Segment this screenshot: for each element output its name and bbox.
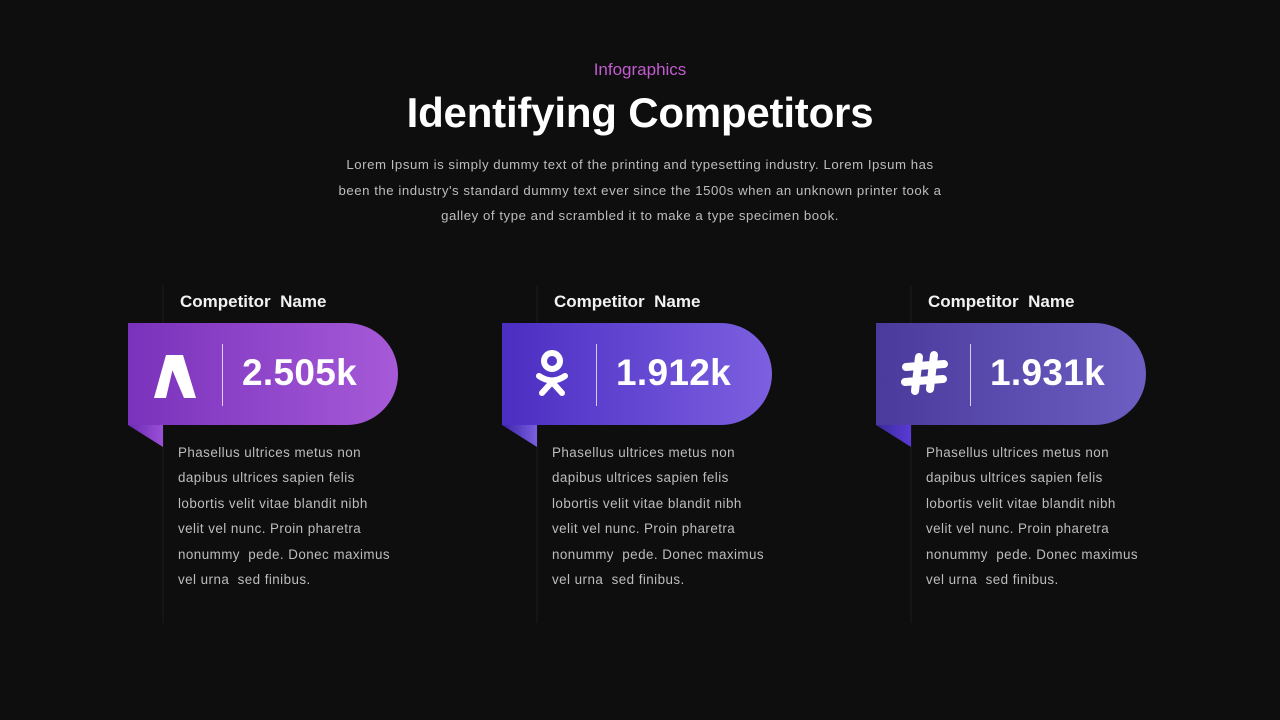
description 1: [178, 445, 390, 587]
title: Identifying Competitors: [407, 89, 873, 136]
description 1: dapibus ultrices sapien felis: [178, 470, 355, 485]
description 1: velit vel nunc. Proin pharetra: [178, 521, 361, 536]
intro text: Lorem Ipsum is simply dummy text of the printing and typesetting industry. Lorem Ipsum has: [346, 157, 934, 172]
description 3: dapibus ultrices sapien felis: [926, 470, 1103, 485]
description 2: nonummy pede. Donec maximus: [552, 547, 764, 562]
description 1: nonummy pede. Donec maximus: [178, 547, 390, 562]
subtitle: Infographics: [594, 60, 686, 79]
intro text: been the industry's standard dummy text ever since the 1500s when an unknown printer took a: [338, 182, 942, 198]
fold triangle 2: [502, 425, 537, 447]
value pill 2: [502, 323, 772, 425]
intro text: [338, 157, 942, 223]
heading: competitor 1: Competitor Name: [180, 292, 326, 311]
description 3: nonummy pede. Donec maximus: [926, 547, 1138, 562]
description 3: vel urna sed finibus.: [926, 572, 1059, 587]
panel: competitor 2: [502, 292, 772, 587]
description 3: velit vel nunc. Proin pharetra: [926, 521, 1109, 536]
description 3: Phasellus ultrices metus non: [926, 445, 1109, 460]
icon: odnoklassniki: [536, 350, 568, 396]
icon: slack hash: [901, 351, 948, 395]
panel: competitor 1: [128, 292, 398, 587]
description 1: vel urna sed finibus.: [178, 572, 311, 587]
description 2: Phasellus ultrices metus non: [552, 445, 735, 460]
fold triangle 1: [128, 425, 163, 447]
value 3: 1.931k: [990, 352, 1105, 393]
value 1: 2.505k: [242, 352, 357, 393]
description 1: Phasellus ultrices metus non: [178, 445, 361, 460]
fold triangle 3: [876, 425, 911, 447]
panel: competitor 3: [876, 292, 1146, 587]
heading: competitor 3: Competitor Name: [928, 292, 1074, 311]
intro text: galley of type and scrambled it to make a type specimen book.: [441, 208, 839, 223]
description 2: dapibus ultrices sapien felis: [552, 470, 729, 485]
heading: competitor 2: Competitor Name: [554, 292, 700, 311]
icon: A logo: [154, 355, 196, 398]
description 3: lobortis velit vitae blandit nibh: [926, 496, 1116, 511]
value pill 1: [128, 323, 398, 425]
description 2: velit vel nunc. Proin pharetra: [552, 521, 735, 536]
description 3: [926, 445, 1138, 587]
description 2: vel urna sed finibus.: [552, 572, 685, 587]
value pill 3: [876, 323, 1146, 425]
description 1: lobortis velit vitae blandit nibh: [178, 496, 368, 511]
description 2: lobortis velit vitae blandit nibh: [552, 496, 742, 511]
description 2: [552, 445, 764, 587]
value 2: 1.912k: [616, 352, 731, 393]
